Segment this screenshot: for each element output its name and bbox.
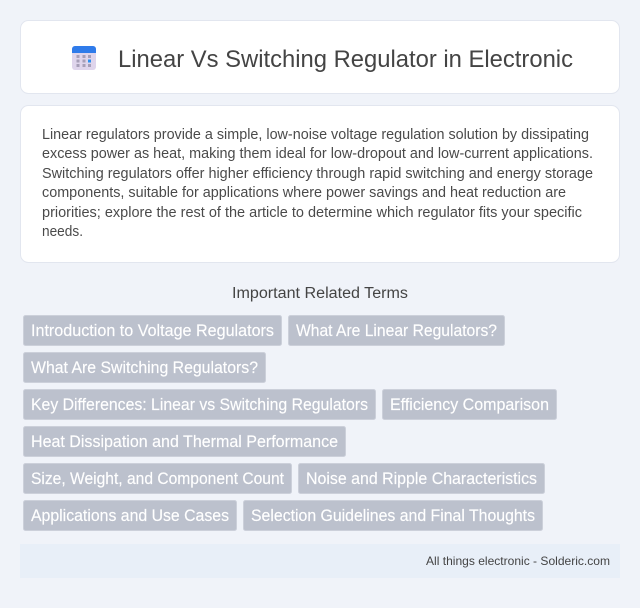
tag — [298, 464, 544, 494]
tag: What Are Linear Regulators? — [296, 322, 497, 340]
summary text: Switching regulators offer higher efficiency through rapid switching and energy storage — [42, 166, 593, 182]
tag — [24, 316, 282, 346]
summary text: priorities; explore the rest of the article to determine which regulator fits your specific — [42, 205, 582, 221]
tag: Selection Guidelines and Final Thoughts — [251, 507, 535, 525]
tag — [382, 390, 556, 420]
footer: All things electronic - Solderic.com — [426, 554, 610, 568]
tag — [24, 464, 292, 494]
tag: Key Differences: Linear vs Switching Regulators — [31, 396, 368, 414]
tag: What Are Switching Regulators? — [31, 359, 258, 377]
panel: summary — [20, 106, 620, 262]
tag — [24, 426, 346, 456]
summary text: needs. — [42, 224, 83, 240]
tag: Size, Weight, and Component Count — [31, 470, 284, 488]
tag list — [24, 316, 556, 530]
tag — [24, 390, 376, 420]
tag: Noise and Ripple Characteristics — [306, 470, 537, 488]
tag: Applications and Use Cases — [31, 507, 229, 525]
summary text: Linear regulators provide a simple, low-noise voltage regulation solution by dissipating — [42, 127, 589, 143]
summary text: excess power as heat, making them ideal for low-dropout and low-current applications. — [42, 146, 593, 162]
panel: title card — [20, 20, 620, 94]
footer — [20, 544, 620, 578]
tag: Introduction to Voltage Regulators — [31, 322, 274, 340]
tag — [288, 316, 504, 346]
summary text: components, suitable for applications where power savings and heat reduction are — [42, 185, 566, 201]
title: Linear Vs Switching Regulator in Electronic — [118, 46, 573, 73]
tag — [244, 500, 542, 530]
icon: calendar — [72, 46, 96, 70]
tag: Heat Dissipation and Thermal Performance — [31, 433, 338, 451]
heading: related terms: Important Related Terms — [232, 285, 408, 302]
tag: Efficiency Comparison — [390, 396, 549, 414]
tag — [24, 352, 266, 382]
summary text — [42, 127, 593, 240]
tag — [24, 500, 236, 530]
